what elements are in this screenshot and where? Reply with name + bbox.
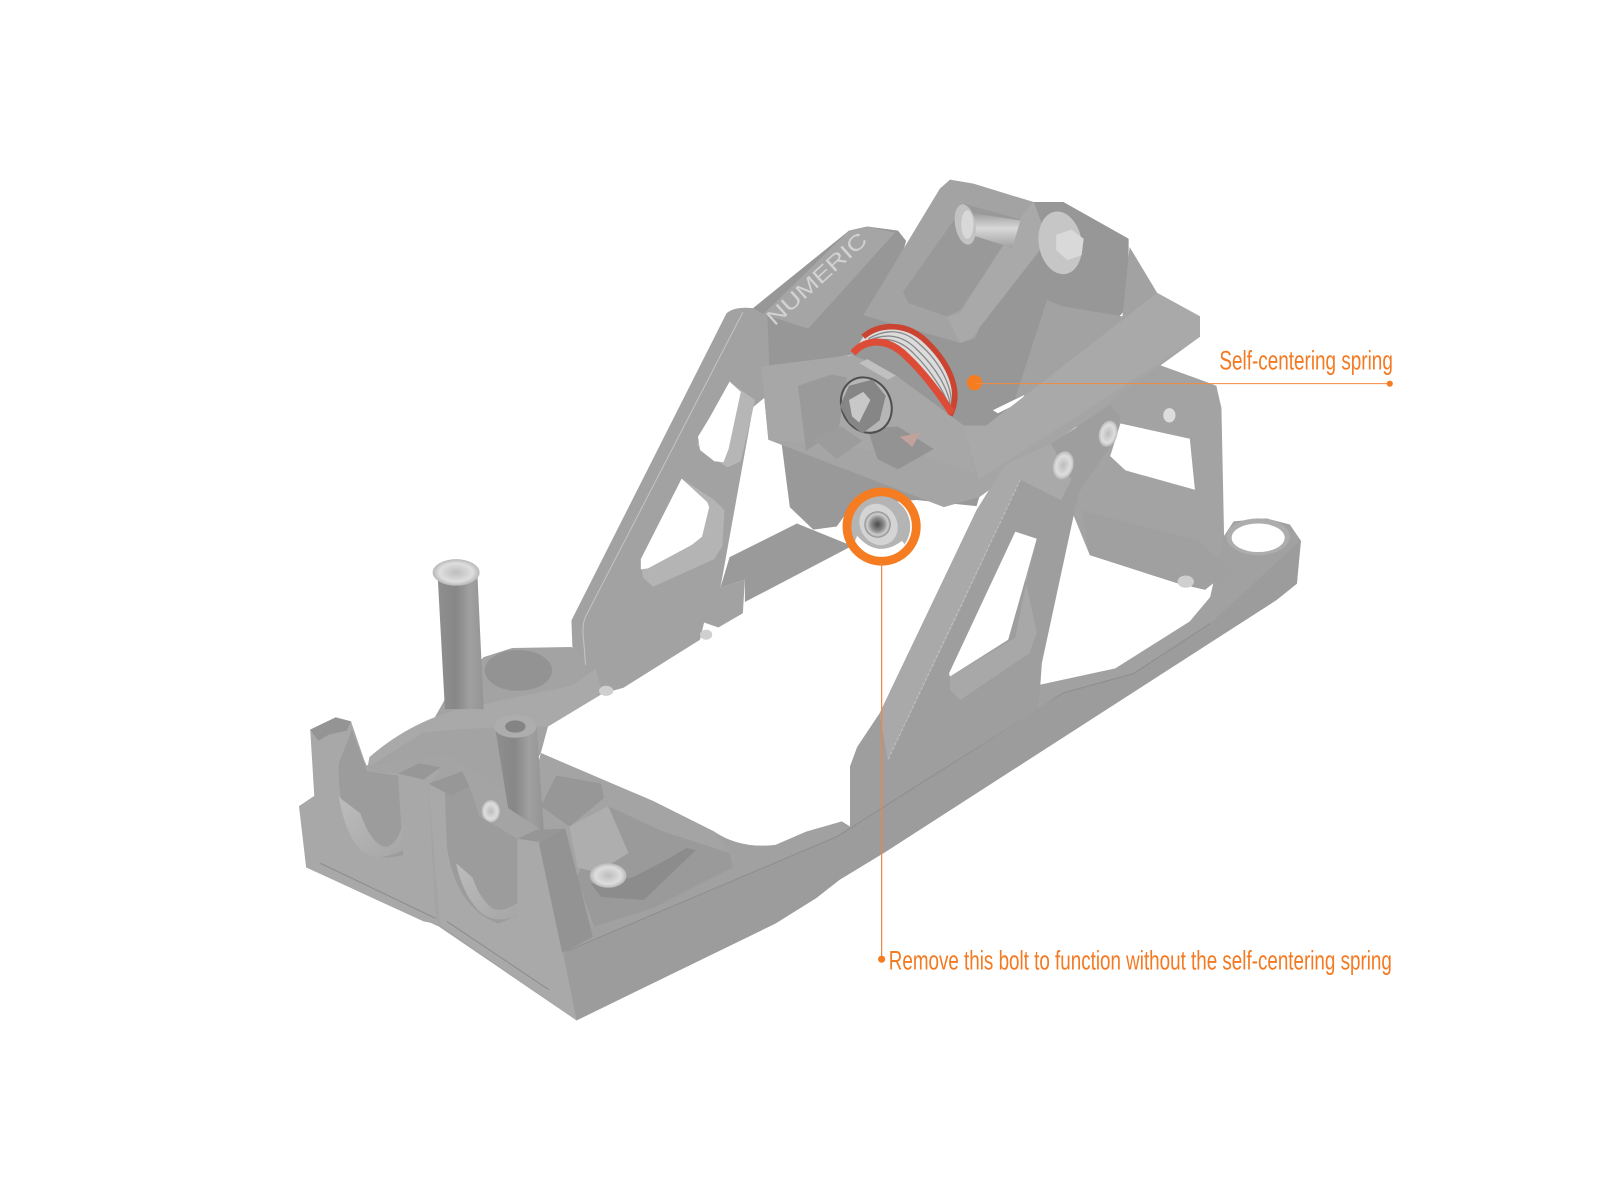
block front below yoke	[852, 315, 1061, 426]
right leg with bolts	[850, 405, 1120, 827]
callout end dot: spring	[1387, 381, 1393, 387]
lower rocker plate	[782, 408, 985, 530]
hex bolt and bearing	[1034, 208, 1087, 278]
product illustration: mount frame	[299, 180, 1301, 1020]
callout leader: spring	[974, 383, 1390, 385]
main flanged bolt	[830, 367, 903, 443]
self-centering spring	[853, 327, 955, 415]
front clamp blocks	[299, 717, 593, 1020]
right base bar and frame	[541, 518, 1301, 1020]
left clamp	[299, 717, 441, 924]
left rail behind plate	[720, 523, 852, 602]
right rear plate	[1071, 337, 1229, 590]
left side plate	[571, 308, 770, 694]
dark side of clamp	[539, 829, 593, 953]
main V bracket	[761, 247, 1200, 507]
steel pin	[964, 212, 1020, 248]
lower slot	[641, 479, 724, 587]
upper slot	[697, 382, 755, 467]
clamp backing	[306, 755, 577, 1020]
callout leader: bolt	[881, 563, 883, 959]
upper yoke with pin	[863, 180, 1129, 423]
upper lever with NUMERIC logo: NUMERIC	[762, 228, 872, 330]
upper lever with NUMERIC logo	[750, 227, 906, 369]
small pocket screw	[590, 863, 627, 888]
callout dot: spring	[967, 375, 982, 390]
callout: bolt highlight ring with screw	[847, 492, 916, 561]
callout label: spring: Self-centering spring	[1219, 345, 1393, 375]
left rear ring and S-curve arm	[367, 647, 602, 806]
callout label: remove this bolt: Remove this bolt to function without the self-centering spring	[889, 945, 1392, 975]
post: rear standoff with screw	[433, 559, 484, 709]
callout dot: bolt	[878, 956, 885, 963]
right rear pin	[1163, 408, 1176, 422]
leg bolts	[1096, 418, 1120, 449]
right rear lower block	[1082, 510, 1230, 590]
right clamp	[429, 771, 577, 1020]
yoke slot	[903, 204, 1020, 316]
bolt feet	[599, 576, 1194, 696]
frame pocket	[520, 753, 733, 954]
white slivers	[993, 318, 1139, 413]
post: front standoff	[494, 715, 544, 832]
bracket interior behind arm	[1015, 247, 1157, 398]
leg window	[950, 532, 1037, 700]
small clamp screw	[482, 800, 500, 822]
